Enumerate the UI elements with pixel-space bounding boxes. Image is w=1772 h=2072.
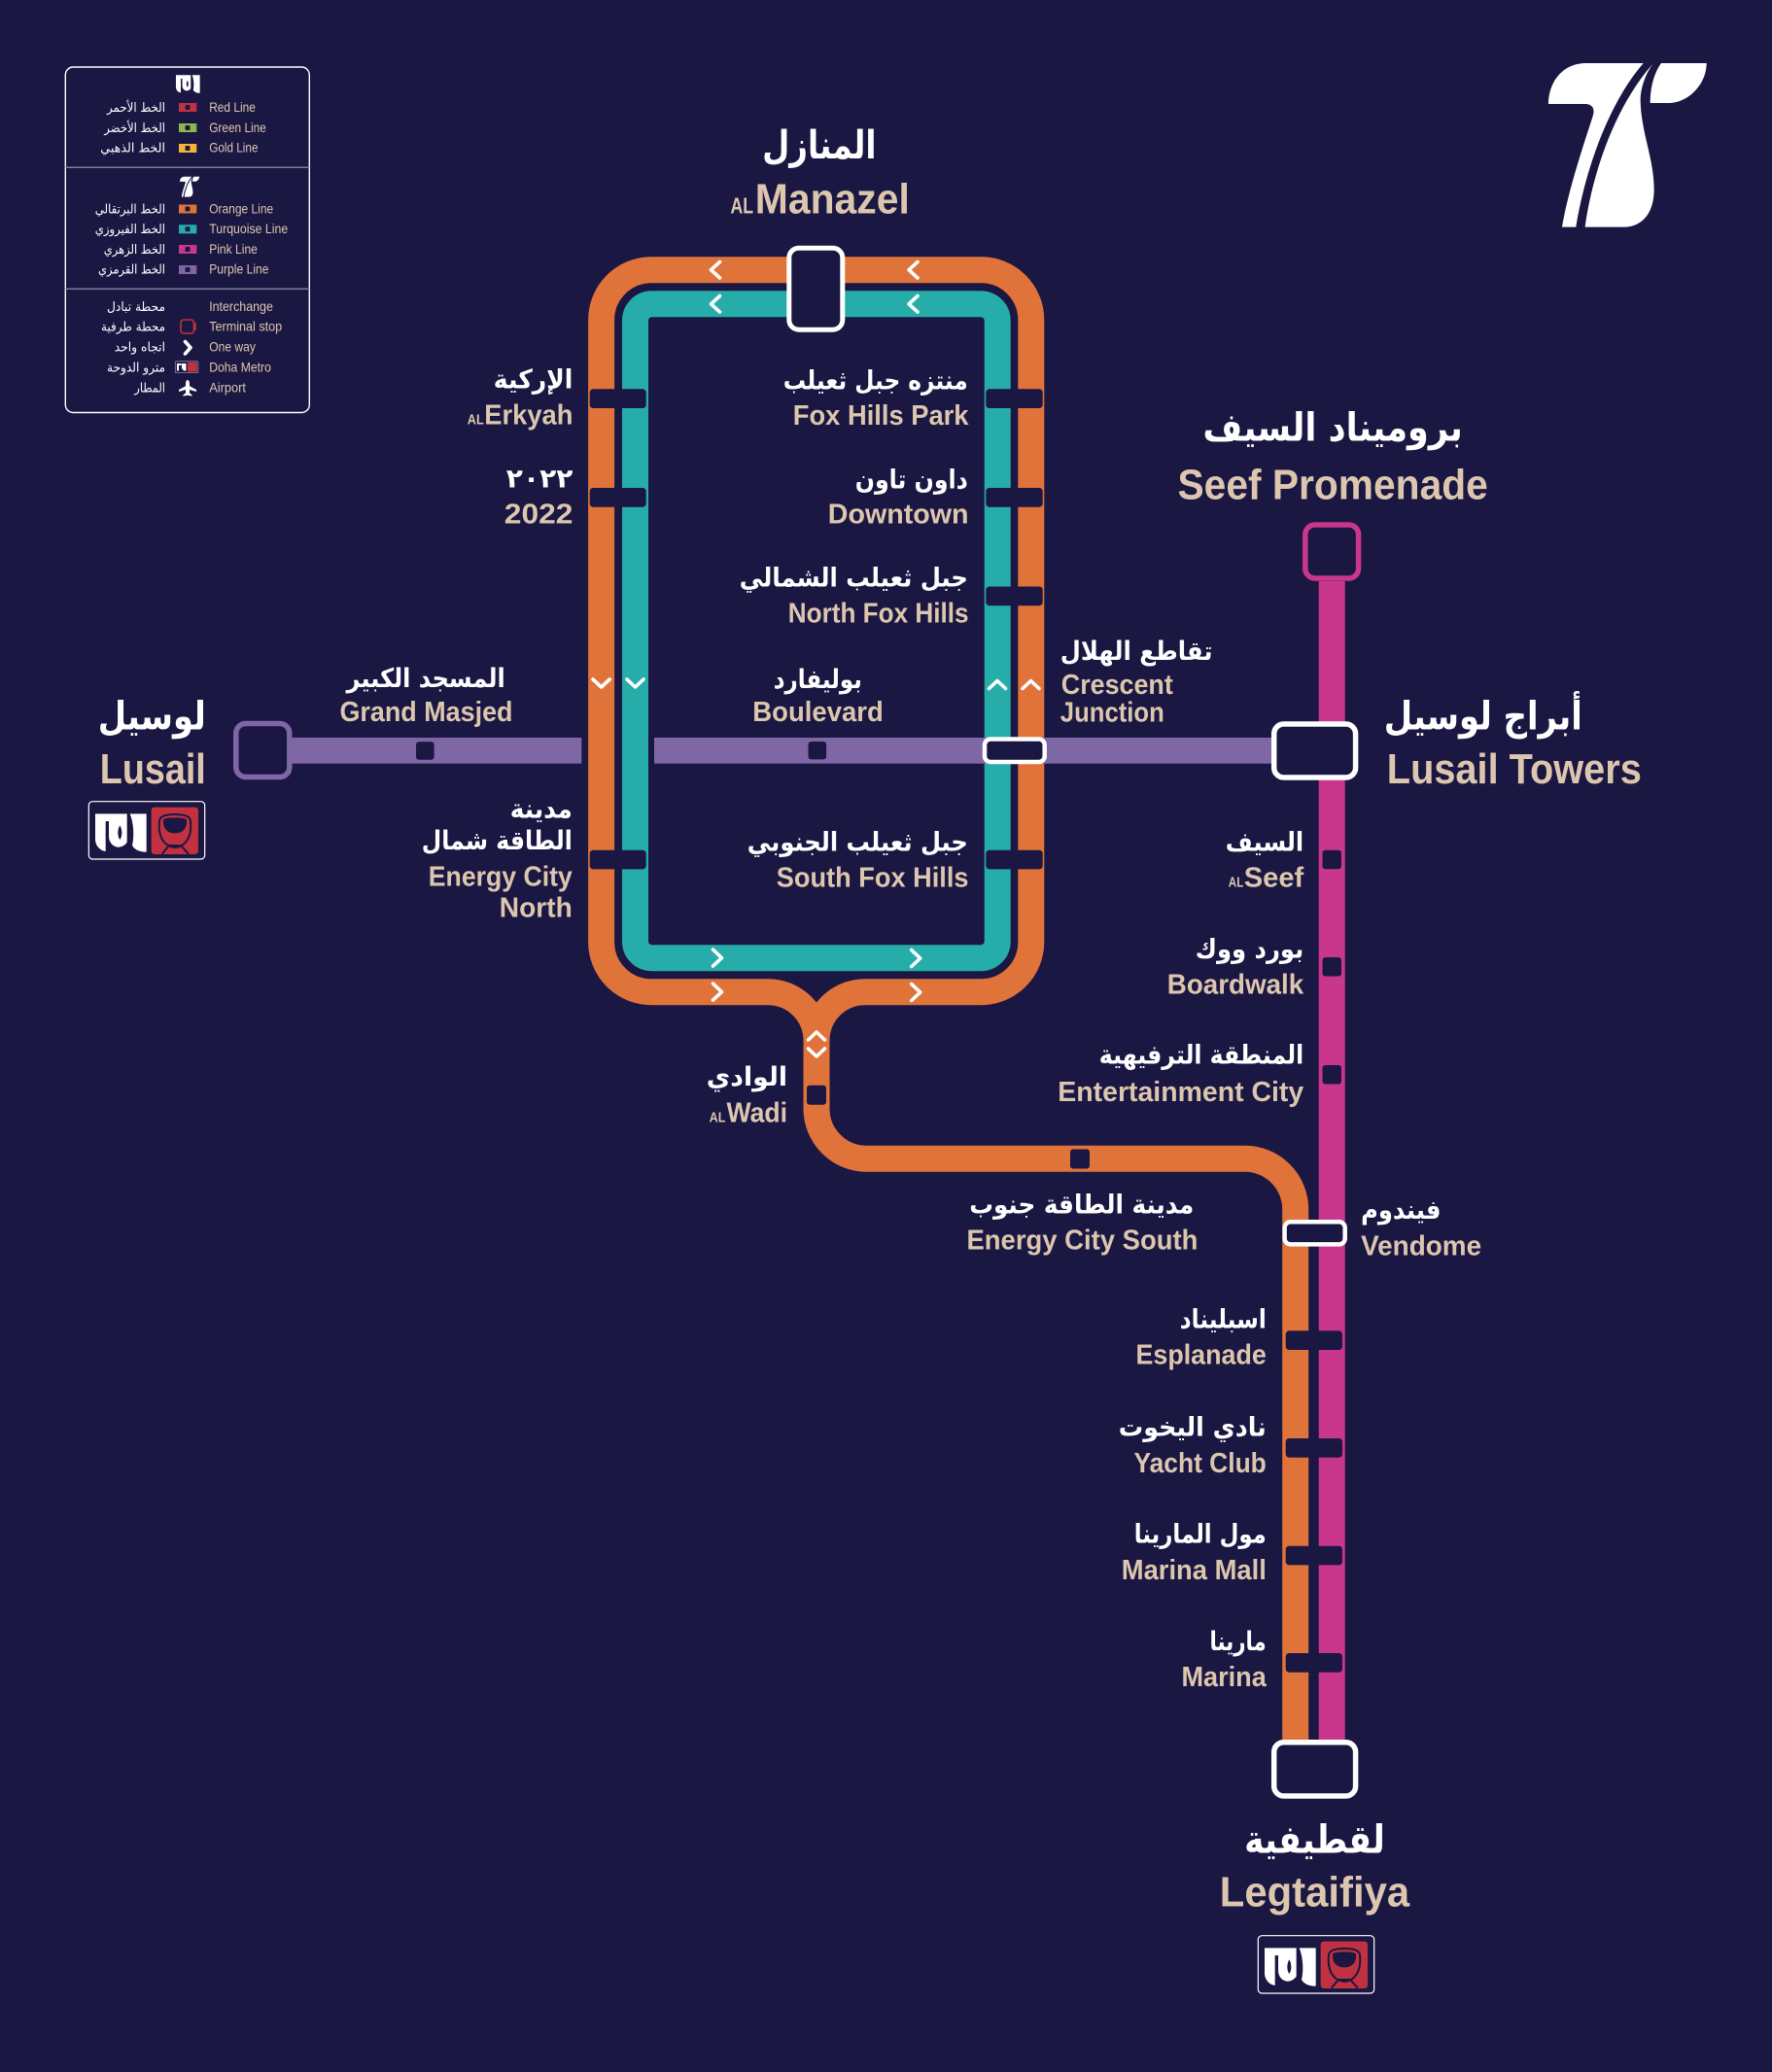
orange line south branch	[817, 1038, 1296, 1744]
label: Marina: Marina	[1181, 1662, 1268, 1693]
interchange: Vendome	[1285, 1222, 1345, 1244]
label: Boardwalk: بورد ووك	[1196, 935, 1303, 965]
legend row: Orange Line: Orange Line	[209, 200, 273, 216]
label: Grand Masjed: المسجد الكبير	[345, 664, 505, 694]
orange line ring	[602, 270, 1031, 1041]
label: Seef Promenade	[1178, 405, 1488, 508]
legend row: Turquoise Line: الخط الفيروزي	[95, 223, 165, 237]
legend row: Purple Line: Purple Line	[209, 261, 269, 277]
legend row: One way: اتجاه واحد	[115, 341, 165, 356]
direction arrows	[593, 262, 1039, 1056]
label: Entertainment City: المنطقة الترفيهية	[1099, 1040, 1303, 1071]
label: Esplanade: اسبليناد	[1180, 1305, 1267, 1335]
label: Crescent Junction: Crescent	[1061, 670, 1173, 701]
label: Lusail	[98, 695, 206, 793]
label: North Fox Hills	[740, 564, 968, 630]
interchange: Lusail Towers	[1274, 724, 1356, 777]
legend row: Doha Metro: Doha Metro	[209, 359, 271, 374]
interchange: Crescent Junction	[985, 739, 1045, 762]
label: Al Erkyah: الإركية	[494, 365, 573, 396]
terminal: Legtaifiya	[1274, 1743, 1356, 1796]
label: Energy City North	[422, 795, 573, 923]
legend row: Interchange	[107, 298, 273, 315]
label: Crescent Junction	[1060, 637, 1213, 729]
label: Boulevard	[752, 665, 884, 728]
label: Al Erkyah: AL	[468, 412, 484, 428]
label: Boulevard: Boulevard	[752, 697, 884, 728]
label: South Fox Hills: جبل ثعيلب الجنوبي	[747, 828, 968, 858]
label: Al Erkyah	[468, 365, 573, 432]
label: Lusail: لوسيل	[98, 695, 206, 740]
legend row: Interchange: Interchange	[209, 298, 273, 314]
label: Legtaifiya: Legtaifiya	[1220, 1869, 1410, 1917]
label: Fox Hills Park: منتزه جبل ثعيلب	[783, 365, 968, 396]
label: Energy City South: مدينة الطاقة جنوب	[969, 1191, 1194, 1221]
icon: tram logo small	[180, 177, 199, 197]
label: Energy City North: Energy City	[429, 862, 573, 893]
label: Crescent Junction: تقاطع الهلال	[1060, 637, 1212, 667]
label: Al Seef: Seef	[1244, 863, 1304, 894]
label: Yacht Club: نادي اليخوت	[1119, 1413, 1267, 1443]
label: Al Manazel: Manazel	[755, 175, 910, 223]
legend row: Orange Line	[95, 200, 273, 217]
legend row: Doha Metro	[107, 359, 271, 375]
label: North Fox Hills: جبل ثعيلب الشمالي	[740, 564, 968, 594]
legend row: Turquoise Line	[95, 221, 288, 237]
legend row: Pink Line: Pink Line	[209, 241, 258, 257]
label: Downtown: Downtown	[828, 500, 969, 531]
label: Marina Mall: Marina Mall	[1122, 1555, 1267, 1586]
label: Energy City South: Energy City South	[967, 1225, 1198, 1256]
legend row: Terminal stop: Terminal stop	[209, 319, 282, 334]
label: South Fox Hills: South Fox Hills	[777, 863, 969, 894]
legend row: Airport: Airport	[209, 379, 246, 395]
legend row: Gold Line	[100, 140, 259, 156]
terminal: Al Manazel	[789, 248, 843, 329]
label: Downtown	[828, 466, 968, 531]
terminal: Seef Promenade	[1305, 525, 1359, 578]
label: Fox Hills Park	[783, 365, 969, 432]
station labels	[98, 123, 1642, 1917]
label: North Fox Hills: North Fox Hills	[788, 599, 969, 630]
label: Grand Masjed: Grand Masjed	[340, 697, 513, 728]
label: Marina: مارينا	[1209, 1627, 1267, 1657]
legend row: One way: One way	[209, 339, 256, 355]
stops on lines	[416, 389, 1342, 1673]
label: Al Wadi: الوادي	[707, 1062, 787, 1092]
legend row: Interchange: محطة تبادل	[107, 300, 165, 315]
legend row: Orange Line: الخط البرتقالي	[95, 202, 165, 217]
icon: metro logo	[176, 75, 200, 93]
label: South Fox Hills	[747, 828, 968, 894]
label: Yacht Club: Yacht Club	[1133, 1448, 1267, 1479]
legend row: Doha Metro: مترو الدوحة	[107, 361, 165, 375]
label: Esplanade	[1135, 1305, 1267, 1370]
label: Al Erkyah: Erkyah	[484, 400, 573, 432]
label: Energy City North: North	[500, 892, 573, 923]
label: Al Manazel	[731, 123, 910, 223]
legend row: One way	[115, 339, 256, 356]
pink line	[1319, 581, 1345, 1743]
legend row: Red Line: Red Line	[209, 99, 256, 115]
label: Marina Mall	[1122, 1520, 1267, 1586]
label: Al Seef: السيف	[1226, 828, 1303, 858]
legend row: Purple Line: الخط القرمزي	[98, 263, 165, 278]
label: Crescent Junction: Junction	[1060, 698, 1164, 729]
label: Vendome	[1361, 1195, 1481, 1262]
legend row: Terminal stop	[101, 319, 282, 335]
label: Legtaifiya	[1220, 1818, 1410, 1917]
label: Boardwalk	[1167, 935, 1304, 1001]
label: Lusail: Lusail	[100, 745, 206, 793]
label: 2022: ٢٠٢٢	[506, 465, 573, 494]
legend row: Purple Line	[98, 261, 269, 278]
label: Al Wadi	[707, 1062, 787, 1128]
label: Al Wadi: AL	[710, 1109, 725, 1125]
label: Al Manazel: AL	[731, 192, 753, 218]
label: Boardwalk: Boardwalk	[1167, 970, 1304, 1001]
label: 2022	[504, 465, 573, 531]
label: 2022: 2022	[504, 500, 573, 531]
label: Seef Promenade: Seef Promenade	[1177, 461, 1488, 508]
label: Al Wadi: Wadi	[727, 1097, 787, 1128]
legend row: Red Line: الخط الأحمر	[106, 99, 165, 116]
legend row: Gold Line: Gold Line	[209, 140, 259, 155]
label: Energy City North: الطاقة شمال	[422, 826, 573, 856]
label: Seef Promenade: بروميناد السيف	[1202, 405, 1463, 450]
label: Entertainment City	[1058, 1040, 1303, 1108]
label: Al Manazel: المنازل	[762, 123, 877, 168]
badge: Doha Metro at Lusail	[88, 802, 205, 859]
label: Vendome: Vendome	[1361, 1231, 1481, 1262]
label: Boulevard: بوليفارد	[774, 665, 862, 695]
label: Downtown: داون تاون	[855, 466, 968, 496]
label: Yacht Club	[1119, 1413, 1267, 1479]
legend row: Green Line	[103, 120, 266, 136]
label: Esplanade: Esplanade	[1135, 1339, 1267, 1370]
label: Lusail Towers	[1384, 691, 1642, 793]
legend panel	[65, 67, 309, 412]
label: Entertainment City: Entertainment City	[1058, 1077, 1303, 1108]
badge: Doha Metro at Legtaifiya	[1258, 1936, 1374, 1993]
legend row: Turquoise Line: Turquoise Line	[209, 221, 288, 236]
label: Legtaifiya: لقطيفية	[1244, 1818, 1385, 1863]
legend row: Airport	[133, 379, 246, 397]
legend row: Red Line	[106, 99, 256, 116]
label: Marina	[1182, 1627, 1268, 1693]
legend row: Green Line: Green Line	[209, 120, 266, 135]
label: Marina Mall: مول المارينا	[1134, 1520, 1267, 1550]
turquoise line ring	[636, 304, 997, 958]
label: Fox Hills Park: Fox Hills Park	[793, 400, 969, 432]
legend row: Pink Line	[104, 241, 258, 258]
purple line west	[282, 738, 581, 764]
legend row: Airport: المطار	[133, 381, 165, 396]
legend row: Gold Line: الخط الذهبي	[100, 142, 165, 156]
legend row: Terminal stop: محطة طرفية	[101, 321, 165, 335]
terminal: Lusail	[236, 723, 290, 777]
logo: Lusail tram T mark	[1548, 63, 1707, 227]
label: Al Seef	[1226, 828, 1304, 894]
legend row: Pink Line: الخط الزهري	[104, 243, 165, 258]
label: Vendome: فيندوم	[1361, 1195, 1441, 1226]
label: Grand Masjed	[340, 664, 513, 728]
label: Energy City South	[966, 1191, 1198, 1256]
label: Energy City North: مدينة	[510, 795, 573, 825]
legend row: Green Line: الخط الأخضر	[103, 120, 165, 136]
label: Lusail Towers: Lusail Towers	[1387, 745, 1642, 793]
label: Al Seef: AL	[1229, 875, 1243, 890]
label: Lusail Towers: أبراج لوسيل	[1384, 691, 1582, 740]
purple line east	[654, 738, 1276, 764]
